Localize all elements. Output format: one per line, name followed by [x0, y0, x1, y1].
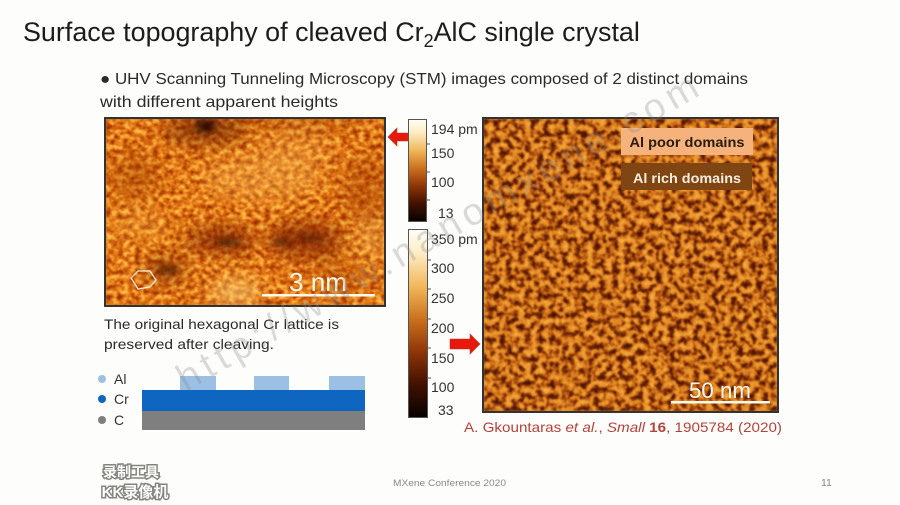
title: Surface topography of cleaved Cr: [23, 17, 424, 47]
bullet text: with different apparent heights: [99, 94, 338, 111]
scale bar: 50 nm: [671, 378, 770, 404]
scale bar: 50 nm: 50 nm: [689, 378, 751, 403]
label: Al poor domains: [621, 128, 753, 155]
watermark: recorder logo: KK录像机: [102, 483, 168, 501]
caption: hexagonal lattice: preserved after cleaving.: [104, 336, 274, 352]
footer: page number: 11: [821, 477, 832, 489]
caption: hexagonal lattice: [104, 316, 339, 352]
colour bar: 33 to 350 pm: 200: [431, 320, 455, 336]
colour bar: 33 to 350 pm: 33: [438, 402, 454, 418]
label: Al poor domains: Al poor domains: [630, 134, 745, 150]
scale bar: 3 nm: [262, 267, 375, 297]
legend: Al, Cr, C: [98, 371, 129, 428]
arrow: to large STM image: [450, 334, 480, 354]
colour bar: 33 to 350 pm: 100: [431, 379, 455, 395]
colour bar: 33 to 350 pm: 300: [431, 260, 455, 276]
colour bar: 13 to 194 pm: [408, 120, 478, 222]
colour bar: 13 to 194 pm: 194 pm: [431, 121, 478, 137]
footer: conference name: MXene Conference 2020: [393, 478, 506, 489]
legend: Al, Cr, C: Cr: [114, 391, 129, 407]
title: AlC single crystal: [434, 17, 640, 47]
title: 2: [424, 31, 434, 51]
colour bar: 33 to 350 pm: 250: [431, 290, 455, 306]
icon: hexagon lattice marker: [131, 271, 156, 289]
bullet text: ● UHV Scanning Tunneling Microscopy (STM) images composed of 2 distinct domains: [100, 71, 748, 88]
colour bar: 33 to 350 pm: 150: [431, 350, 455, 366]
colour bar: 33 to 350 pm: 350 pm: [431, 231, 478, 247]
watermark: recorder logo: [102, 464, 168, 501]
label: Al rich domains: Al rich domains: [633, 170, 741, 186]
panel: small-scale STM image: [105, 114, 390, 306]
colour bar: 33 to 350 pm: [408, 230, 478, 418]
legend: Al, Cr, C: C: [114, 412, 124, 428]
arrow: to top of colour bar: [388, 128, 408, 146]
scale bar: 3 nm: 3 nm: [289, 267, 347, 297]
watermark: URL: http://www.nanomxene.com: [170, 66, 706, 400]
caption: hexagonal lattice: The original hexagonal Cr lattice is: [104, 316, 339, 332]
colour bar: 13 to 194 pm: 13: [438, 205, 454, 221]
citation: A. Gkountaras et al., Small 16, 1905784 (2020): [464, 419, 782, 435]
colour bar: 13 to 194 pm: 150: [431, 145, 455, 161]
label: Al rich domains: [621, 163, 752, 190]
legend: Al, Cr, C: Al: [114, 371, 126, 387]
panel: large-scale STM image: [483, 118, 778, 412]
layer diagram: [142, 376, 365, 430]
watermark: recorder logo: 录制工具: [103, 464, 159, 480]
bullet text: [99, 71, 748, 111]
colour bar: 13 to 194 pm: 100: [431, 174, 455, 190]
